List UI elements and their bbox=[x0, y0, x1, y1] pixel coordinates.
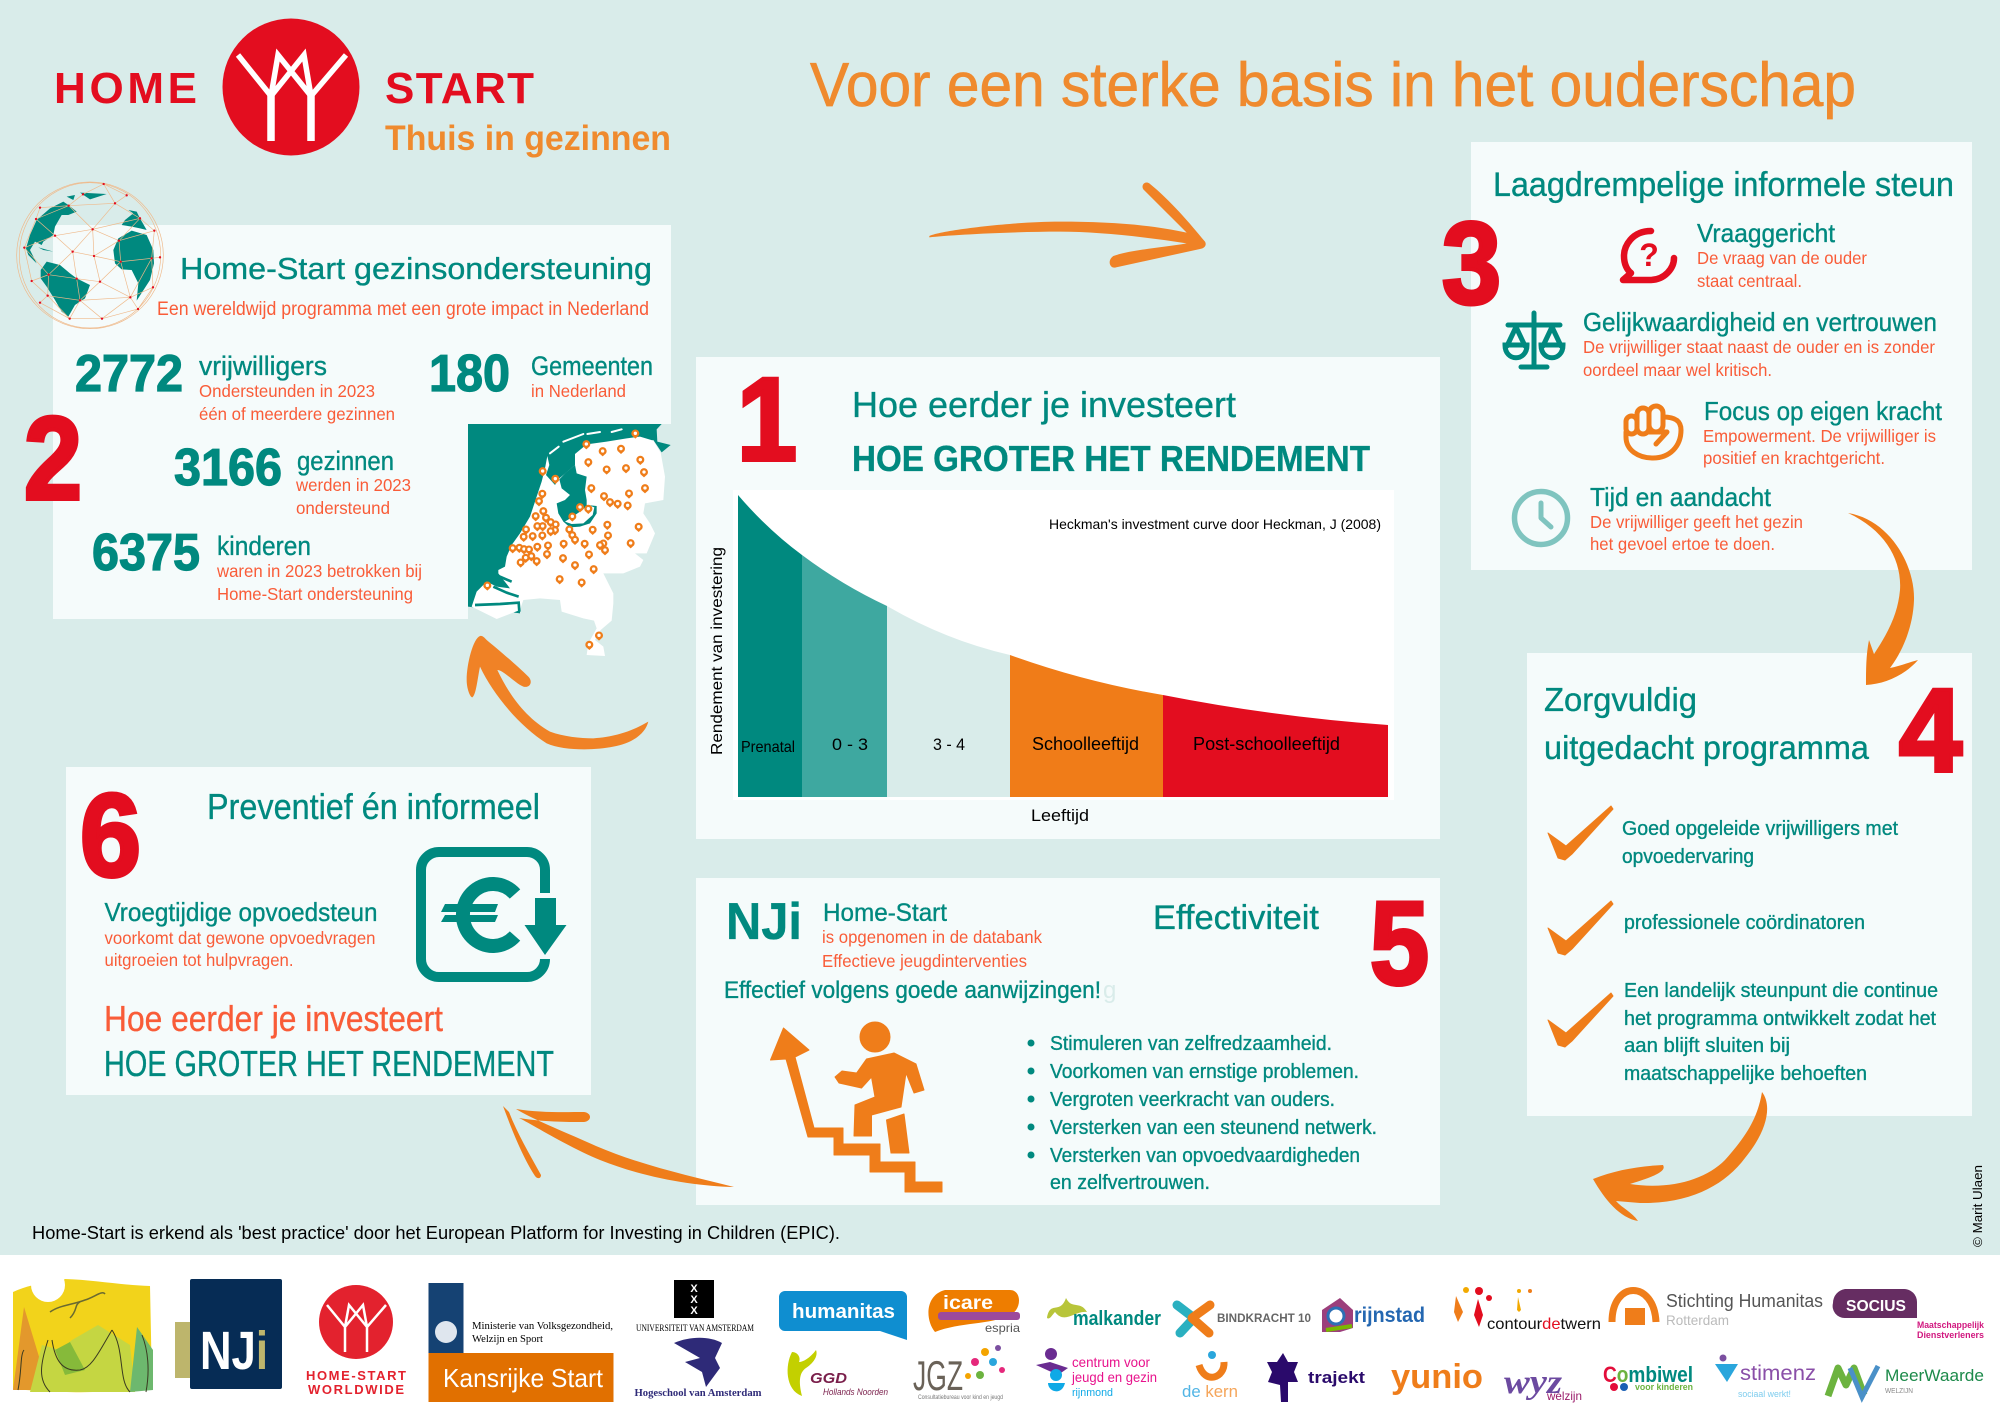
item: gelijkwaardigheid: oordeel maar wel kritisch. bbox=[1583, 360, 1772, 380]
logo: Kansrijke Start bbox=[428, 1283, 614, 1402]
logo: Home-Start bbox=[54, 18, 671, 158]
check item 1: Goed opgeleide vrijwilligers met bbox=[1622, 818, 1898, 840]
bullet list bbox=[1028, 1033, 1377, 1194]
heading line 2: HOE GROTER HET RENDEMENT bbox=[852, 438, 1370, 479]
NJi text: Home-Start bbox=[823, 899, 947, 927]
logo: MeerWaarde Welzijn: WELZIJN bbox=[1885, 1388, 1913, 1395]
number 1: 1 bbox=[737, 354, 797, 486]
logo: Kansrijke Start: Ministerie van Volksgezondheid, bbox=[472, 1320, 613, 1332]
bullet list: Versterken van een steunend netwerk. bbox=[1050, 1117, 1377, 1139]
panel 4: zorgvuldig programma: uitgedacht programma bbox=[1544, 729, 1870, 766]
item: gelijkwaardigheid bbox=[1505, 307, 1937, 380]
item: vraaggericht bbox=[1623, 218, 1867, 291]
panel 4: zorgvuldig programma bbox=[1527, 653, 1972, 1116]
text: vroegtijdige opvoedsteun: voorkomt dat gewone opvoedvragen bbox=[104, 928, 376, 948]
stat: 180 Gemeenten: in Nederland bbox=[531, 381, 626, 401]
arrow: step 4 to step 5 bbox=[1593, 1092, 1767, 1221]
logo: centrum voor jeugd en gezin: jeugd en gezin bbox=[1071, 1369, 1157, 1385]
bullet list: Versterken van opvoedvaardigheden bbox=[1050, 1145, 1360, 1167]
text: vroegtijdige opvoedsteun: uitgroeien tot hulpvragen. bbox=[104, 950, 294, 970]
check item 2: professionele coördinatoren bbox=[1624, 912, 1865, 934]
logo: centrum voor jeugd en gezin bbox=[1036, 1348, 1157, 1399]
logo: rijnstad: rijnstad bbox=[1354, 1304, 1425, 1327]
arrow: step 6 to step 2 bbox=[467, 636, 648, 749]
stat: 2772 vrijwilligers: één of meerdere gezinnen bbox=[199, 404, 395, 424]
footer note: Home-Start is erkend als 'best practice' door het European Platform for Investing in Children (EPIC). bbox=[32, 1223, 840, 1243]
y axis label: Rendement van investering bbox=[709, 547, 726, 755]
logo: contourdetwern: contourdetwern bbox=[1487, 1316, 1601, 1333]
item: focus op eigen kracht: Empowerment. De vrijwilliger is bbox=[1703, 426, 1936, 446]
stat: 3166 gezinnen bbox=[174, 439, 411, 518]
NJi mark: NJi bbox=[726, 893, 802, 951]
logo: Kansrijke Start: Kansrijke Start bbox=[443, 1363, 604, 1393]
check item 3: aan blijft sluiten bij bbox=[1624, 1035, 1790, 1057]
logo: NJi: NJi bbox=[200, 1321, 268, 1381]
logo: centrum voor jeugd en gezin: centrum voor bbox=[1072, 1354, 1150, 1370]
panel 6: preventief en informeel bbox=[66, 767, 591, 1095]
arrow: step 3 to step 4 bbox=[1848, 513, 1918, 685]
logo: Universiteit van Amsterdam: X bbox=[690, 1283, 698, 1295]
number 4: 4 bbox=[1899, 665, 1962, 797]
logo: wyz welzijn: wyz bbox=[1504, 1364, 1563, 1401]
item: tijd en aandacht: het gevoel ertoe te doen. bbox=[1590, 534, 1775, 554]
x axis label: Leeftijd bbox=[1031, 806, 1089, 825]
logo: Stichting Humanitas Rotterdam: Rotterdam bbox=[1666, 1312, 1729, 1328]
chart: Heckman curve: Heckman's investment curve door Heckman, J (2008) bbox=[1049, 516, 1381, 532]
logo: wyz welzijn: welzijn bbox=[1546, 1389, 1582, 1403]
item: tijd en aandacht bbox=[1514, 482, 1803, 554]
logo: Socius: SOCIUS bbox=[1846, 1298, 1906, 1315]
logo: Home-Start Worldwide bbox=[306, 1285, 406, 1397]
logo: Combiwel: voor kinderen bbox=[1635, 1382, 1693, 1392]
logo: Bindkracht10 bbox=[1177, 1305, 1311, 1333]
logo: MeerWaarde Welzijn bbox=[1828, 1366, 1984, 1397]
logo: stimenz bbox=[1715, 1354, 1816, 1399]
stat: 6375 kinderen: Home-Start ondersteuning bbox=[217, 584, 413, 604]
stat: 3166 gezinnen: werden in 2023 bbox=[295, 475, 411, 495]
NJi text: is opgenomen in de databank bbox=[822, 927, 1042, 947]
subheading: Effectief volgens goede aanwijzingen! bbox=[724, 977, 1101, 1004]
logo: wyz welzijn bbox=[1504, 1364, 1582, 1403]
stat: 180 Gemeenten: Gemeenten bbox=[531, 351, 653, 381]
stat: 180 Gemeenten bbox=[429, 345, 653, 403]
logo: centrum voor jeugd en gezin: rijnmond bbox=[1072, 1387, 1113, 1399]
logo: Universiteit van Amsterdam bbox=[636, 1280, 754, 1333]
heading: Preventief én informeel bbox=[207, 786, 540, 827]
logo: illustration bbox=[13, 1268, 153, 1392]
logo: Hogeschool van Amsterdam: Hogeschool van Amsterdam bbox=[634, 1388, 762, 1399]
logo: stimenz: sociaal werkt! bbox=[1738, 1389, 1791, 1399]
icon: figure climbing stairs bbox=[770, 1022, 942, 1192]
check item 1 bbox=[1548, 806, 1898, 868]
logo: JGZ: JGZ bbox=[913, 1352, 963, 1399]
logo: GGD: Hollands Noorden bbox=[823, 1387, 888, 1397]
panel 2: gezinsondersteuning bbox=[17, 182, 671, 656]
bullet list: en zelfvertrouwen. bbox=[1050, 1172, 1210, 1194]
panel heading: Home-Start gezinsondersteuning bbox=[180, 251, 652, 286]
heading: Laagdrempelige informele steun bbox=[1493, 166, 1954, 204]
logo strip bbox=[0, 1255, 2000, 1414]
logo: yunio: yunio bbox=[1391, 1358, 1483, 1396]
stat: 2772 vrijwilligers: vrijwilligers bbox=[199, 351, 327, 381]
stat: 3166 gezinnen: gezinnen bbox=[297, 446, 394, 476]
item: gelijkwaardigheid: Gelijkwaardigheid en vertrouwen bbox=[1583, 307, 1937, 337]
bullet list: Vergroten veerkracht van ouders. bbox=[1050, 1089, 1335, 1111]
logo: de kern bbox=[1182, 1351, 1238, 1401]
bullet list: Stimuleren van zelfredzaamheid. bbox=[1050, 1033, 1332, 1055]
check item 3: het programma ontwikkelt zodat het bbox=[1624, 1008, 1936, 1030]
item: gelijkwaardigheid: De vrijwilliger staat naast de ouder en is zonder bbox=[1583, 337, 1935, 357]
stat: 180 Gemeenten: 180 bbox=[429, 345, 510, 403]
logo: Hogeschool van Amsterdam bbox=[634, 1338, 762, 1399]
logo: GGD: GGD bbox=[810, 1370, 847, 1387]
check item 2 bbox=[1548, 901, 1865, 955]
logo: stimenz: stimenz bbox=[1740, 1362, 1816, 1385]
icon: globe bbox=[17, 182, 163, 329]
logo: contourdetwern bbox=[1454, 1287, 1601, 1333]
logo: MeerWaarde Welzijn: MeerWaarde bbox=[1885, 1366, 1984, 1385]
logo word HOME: HOME bbox=[54, 64, 197, 113]
credit: © Marit Ulaen bbox=[1970, 1165, 1985, 1247]
bullet list: Voorkomen van ernstige problemen. bbox=[1050, 1061, 1359, 1083]
stat: 6375 kinderen bbox=[92, 524, 422, 604]
logo: Universiteit van Amsterdam: X bbox=[690, 1305, 698, 1317]
logo emblem bbox=[222, 18, 360, 156]
logo: trajekt: trajekt bbox=[1308, 1368, 1365, 1387]
heading line 1: Hoe eerder je investeert bbox=[852, 384, 1236, 425]
panel 3: laagdrempelige informele steun bbox=[1442, 142, 1972, 570]
logo: Universiteit van Amsterdam: X bbox=[690, 1294, 698, 1306]
stat: 2772 vrijwilligers: Ondersteunden in 2023 bbox=[199, 381, 375, 401]
logo: trajekt bbox=[1267, 1353, 1365, 1402]
stat: 6375 kinderen: waren in 2023 betrokken bij bbox=[216, 561, 422, 581]
slogan line 1: Hoe eerder je investeert bbox=[104, 998, 443, 1039]
check item 3: maatschappelijke behoeften bbox=[1624, 1063, 1867, 1085]
logo: icare: espria bbox=[985, 1321, 1020, 1335]
chart: Heckman curve: 3 - 4 bbox=[933, 735, 965, 754]
logo: Universiteit van Amsterdam: UNIVERSITEIT VAN AMSTERDAM bbox=[636, 1323, 754, 1333]
text: vroegtijdige opvoedsteun: Vroegtijdige opvoedsteun bbox=[104, 897, 378, 927]
number 6: 6 bbox=[80, 770, 141, 902]
logo: Socius: Maatschappelijk bbox=[1917, 1320, 1985, 1331]
logo word START: START bbox=[385, 64, 534, 113]
title: Voor een sterke basis in het ouderschap bbox=[810, 51, 1856, 120]
chart: Heckman curve: Prenatal bbox=[741, 739, 795, 756]
text: vroegtijdige opvoedsteun bbox=[104, 897, 378, 970]
item: vraaggericht: Vraaggericht bbox=[1697, 218, 1836, 248]
NJi text bbox=[822, 899, 1042, 971]
item: focus op eigen kracht bbox=[1626, 396, 1943, 468]
logo: humanitas: humanitas bbox=[792, 1301, 895, 1323]
logo: Stichting Humanitas Rotterdam bbox=[1612, 1290, 1823, 1328]
stat: 3166 gezinnen: ondersteund bbox=[296, 498, 390, 518]
ghost letter: g bbox=[1103, 977, 1116, 1004]
logo: malkander bbox=[1047, 1298, 1161, 1330]
stat: 6375 kinderen: kinderen bbox=[217, 531, 311, 561]
stat: 2772 vrijwilligers: 2772 bbox=[75, 345, 183, 403]
logo: Home-Start Worldwide: HOME-START bbox=[306, 1368, 406, 1383]
number 5: 5 bbox=[1370, 878, 1429, 1010]
logo: Kansrijke Start: Welzijn en Sport bbox=[472, 1333, 543, 1345]
slogan line 2: HOE GROTER HET RENDEMENT bbox=[104, 1043, 554, 1084]
item: vraaggericht: staat centraal. bbox=[1697, 271, 1802, 291]
logo: JGZ: Consultatiebureau voor kind en jeugd bbox=[918, 1395, 1003, 1401]
check item 1: opvoedervaring bbox=[1622, 846, 1754, 868]
logo: Socius bbox=[1833, 1289, 1985, 1341]
logo: icare bbox=[928, 1290, 1020, 1335]
chart: Heckman curve: Post-schoolleeftijd bbox=[1193, 734, 1340, 754]
logo: humanitas bbox=[779, 1291, 907, 1340]
tagline: Thuis in gezinnen bbox=[385, 119, 671, 158]
logo: Socius: Dienstverleners bbox=[1917, 1330, 1984, 1341]
panel subheading: Een wereldwijd programma met een grote impact in Nederland bbox=[157, 299, 649, 320]
chart: Heckman curve: Schoolleeftijd bbox=[1032, 734, 1139, 754]
chart: Heckman curve bbox=[733, 490, 1394, 800]
logo: de kern: de kern bbox=[1182, 1382, 1238, 1401]
logo: Bindkracht10: BINDKRACHT 10 bbox=[1217, 1311, 1311, 1325]
check item 3 bbox=[1548, 980, 1938, 1085]
panel 5: effectiviteit bbox=[696, 878, 1440, 1205]
arrow: step 1 to step 3 bbox=[929, 183, 1206, 268]
panel 1: investeren en rendement bbox=[696, 354, 1440, 839]
logo: Home-Start Worldwide: WORLDWIDE bbox=[308, 1382, 404, 1397]
logo: Stichting Humanitas Rotterdam: Stichting Humanitas bbox=[1666, 1291, 1823, 1311]
item: tijd en aandacht: De vrijwilliger geeft het gezin bbox=[1590, 512, 1803, 532]
check item 3: Een landelijk steunpunt die continue bbox=[1624, 980, 1938, 1002]
item: vraaggericht: De vraag van de ouder bbox=[1697, 248, 1867, 268]
item: focus op eigen kracht: positief en krachtgericht. bbox=[1703, 448, 1885, 468]
chart: Heckman curve: 0 - 3 bbox=[832, 735, 868, 754]
icon: euro saving bbox=[421, 852, 566, 977]
arrow: step 5 to step 6 bbox=[503, 1106, 734, 1187]
item: tijd en aandacht: Tijd en aandacht bbox=[1590, 482, 1772, 512]
stat: 6375 kinderen: 6375 bbox=[92, 524, 200, 582]
logo: Combiwel: Combiwel bbox=[1603, 1362, 1693, 1387]
number 3: 3 bbox=[1442, 198, 1501, 328]
map: Netherlands with locations bbox=[468, 424, 671, 656]
logo: NJi bbox=[175, 1279, 282, 1389]
logo: GGD bbox=[788, 1350, 888, 1397]
stat: 2772 vrijwilligers bbox=[75, 345, 395, 424]
logo: icare: icare bbox=[943, 1293, 993, 1314]
heading: Effectiviteit bbox=[1153, 899, 1320, 937]
heading: Zorgvuldig bbox=[1544, 681, 1697, 718]
NJi text: Effectieve jeugdinterventies bbox=[822, 951, 1027, 971]
stat: 3166 gezinnen: 3166 bbox=[174, 439, 282, 497]
item: focus op eigen kracht: Focus op eigen kracht bbox=[1704, 396, 1943, 426]
number 2: 2 bbox=[24, 393, 82, 525]
logo: malkander: malkander bbox=[1073, 1308, 1161, 1330]
item: vraaggericht: ? bbox=[1639, 237, 1659, 273]
logo: rijnstad bbox=[1322, 1298, 1425, 1332]
